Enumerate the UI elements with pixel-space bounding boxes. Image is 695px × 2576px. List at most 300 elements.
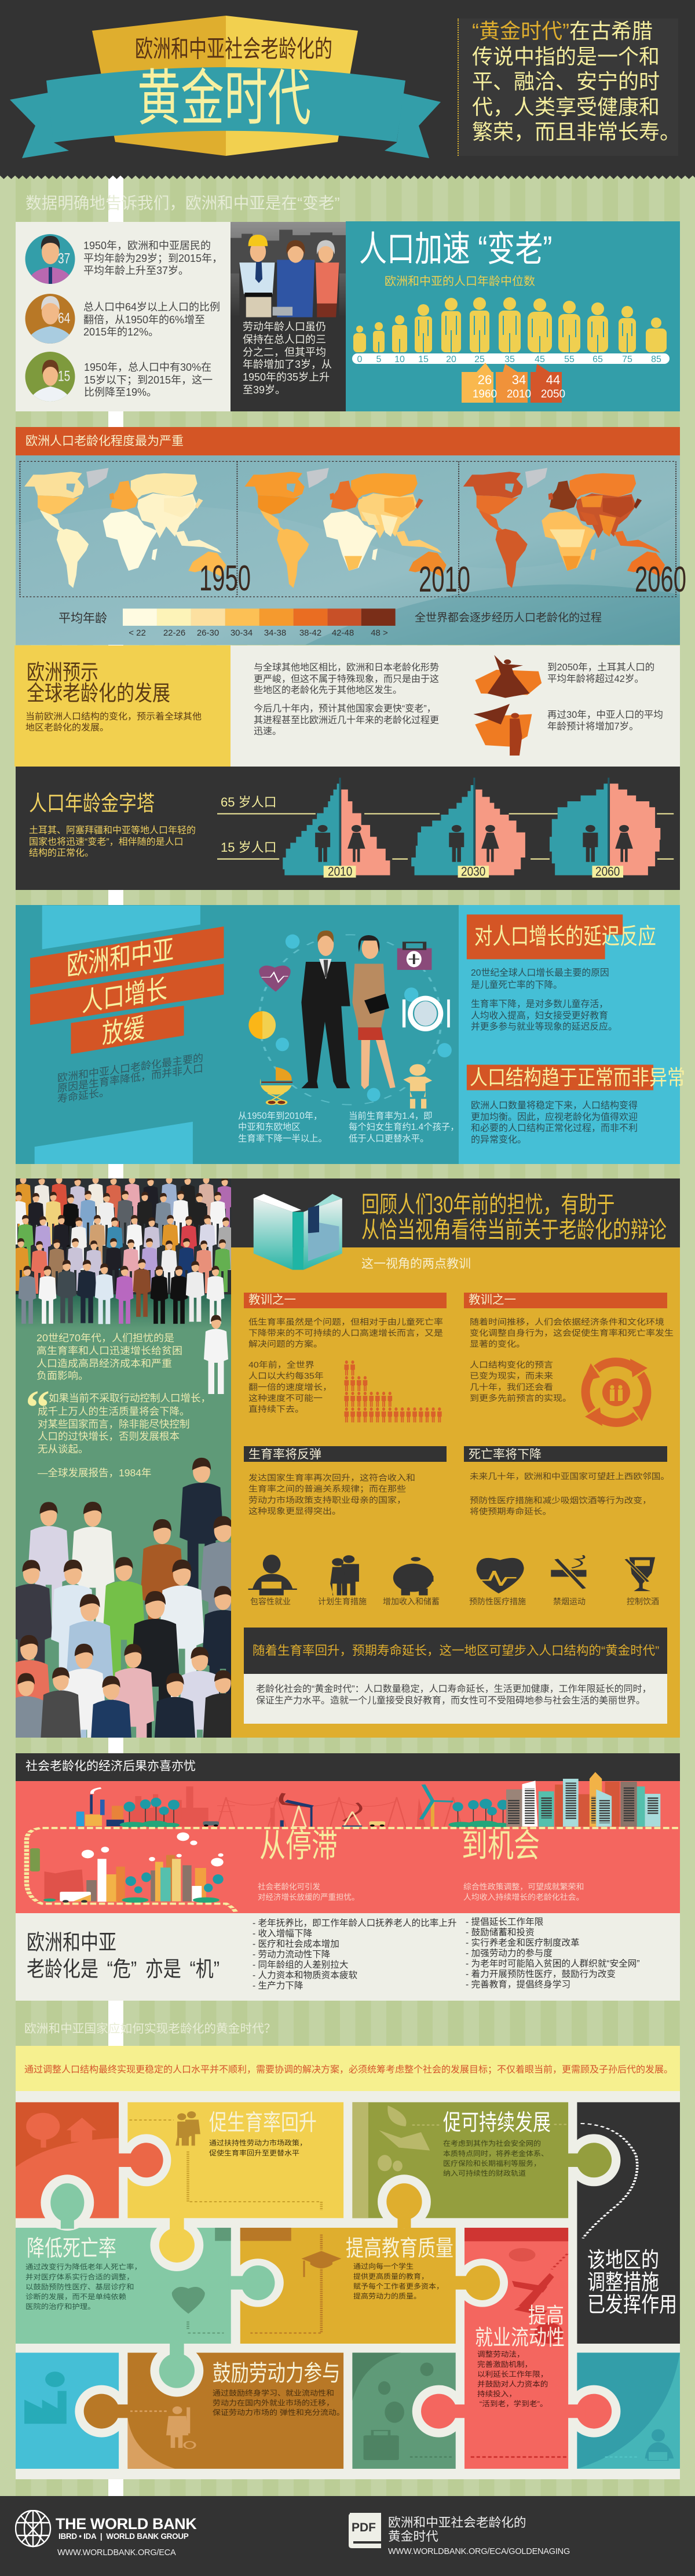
chart subtitle: 欧洲和中亚的人口年龄中位数 bbox=[385, 275, 535, 288]
list responses: - 提倡延长工作年限 bbox=[466, 1917, 543, 1927]
maps 1950 2010 2060: 30-34 bbox=[231, 628, 253, 638]
fertility text bbox=[248, 1473, 415, 1517]
banner: coordinated solutions bbox=[16, 2046, 680, 2091]
text opportunity: 人均收入持续增长的老龄化社会。 bbox=[463, 1892, 584, 1902]
title: golden age: 黄金时代 bbox=[137, 64, 311, 133]
callout 2010: 2010 bbox=[507, 388, 531, 400]
avatar label 15: 15 bbox=[58, 369, 70, 385]
intro text: “黄金时代”在古希腊 bbox=[472, 19, 653, 43]
heading: 欧洲预示 bbox=[27, 660, 98, 684]
heading text: 社会老龄化的经济后果亦喜亦忧 bbox=[25, 1760, 196, 1773]
piece text: sustainability: 纳入可持续性的财政轨道 bbox=[443, 2169, 526, 2177]
working-age text: 1950年的35岁上升 bbox=[243, 371, 330, 383]
report title: 欧洲和中亚社会老龄化的 bbox=[388, 2515, 526, 2530]
working-age text: 年龄增加了3岁，从 bbox=[243, 359, 332, 370]
heading normal structure: 人口结构趋于正常而非异常 bbox=[470, 1066, 685, 1089]
mortality text 2 bbox=[470, 1495, 652, 1518]
piece text: mortality: 诊断的发展，而不是单纯依赖 bbox=[25, 2293, 126, 2300]
heading: 人口加速 “变老” bbox=[359, 230, 552, 269]
quote mark: “ bbox=[25, 1381, 50, 1435]
lesson bar right bbox=[464, 1293, 667, 1308]
text 1970s bbox=[36, 1333, 182, 1381]
mortality text 2: 将使预期寿命延长。 bbox=[470, 1508, 551, 1516]
piece heading: mobility line 2: 就业流动性 bbox=[475, 2326, 565, 2350]
lesson text left: 低生育率虽然是个问题，但相对于由儿童死亡率 bbox=[248, 1318, 443, 1327]
dark piece heading: 调整措施 bbox=[587, 2270, 659, 2294]
intro text: 传说中指的是一个和 bbox=[472, 45, 660, 68]
text 1950 to 2010: 中亚和东欧地区 bbox=[238, 1122, 301, 1132]
callout 2050: 44 bbox=[546, 373, 560, 387]
text fertility 1.4 bbox=[349, 1111, 459, 1144]
callout 2050: 2050 bbox=[541, 388, 565, 400]
text delayed 1: 是儿童死亡率的下降。 bbox=[471, 980, 562, 990]
list responses: - 为老年时可能陷入贫困的人群织就“安全网” bbox=[466, 1959, 640, 1969]
report title: 黄金时代 bbox=[388, 2529, 438, 2544]
year 2010: 2010 bbox=[419, 560, 470, 600]
legend title: 平均年龄 bbox=[58, 612, 107, 625]
text prediction: 已变为现实，而未来 bbox=[470, 1372, 553, 1381]
text prediction: 人口结构变化的预言 bbox=[470, 1361, 553, 1370]
illustration: workers in front of city bbox=[231, 222, 346, 318]
lesson text right: 显著的变化。 bbox=[470, 1340, 525, 1349]
maps 1950 2010 2060 bbox=[16, 455, 680, 645]
section heading: how to achieve: 欧洲和中亚国家应如何实现老龄化的黄金时代？ bbox=[24, 2022, 276, 2035]
text 1: 与全球其他地区相比，欧洲和日本老龄化形势 bbox=[254, 663, 439, 673]
dark piece heading: 该地区的 bbox=[587, 2248, 659, 2272]
logo text: THE WORLD BANK bbox=[56, 2515, 196, 2533]
fact text 2: 2015年的12%。 bbox=[83, 326, 159, 338]
lesson bar left bbox=[244, 1293, 447, 1308]
skewed paragraph bbox=[57, 1052, 203, 1105]
list responses bbox=[466, 1917, 640, 1990]
label: 生育率将反弹 bbox=[248, 1448, 321, 1461]
text 2 bbox=[254, 703, 439, 736]
panel: danger and opportunity bbox=[16, 1913, 680, 2001]
callout 1960 bbox=[473, 373, 497, 400]
maps 1950 2010 2060: < 22 bbox=[129, 628, 146, 638]
panel: lessons from the past bbox=[231, 1178, 680, 1738]
panel: Europe foreshadows bbox=[14, 645, 231, 767]
text normal structure: 的异常变化。 bbox=[471, 1135, 526, 1145]
mortality text 2: 预防性医疗措施和减少吸烟饮酒等行为改变， bbox=[470, 1497, 652, 1505]
list challenges: - 收入增幅下降 bbox=[253, 1929, 312, 1939]
legend note: 全世界都会逐步经历人口老龄化的过程 bbox=[415, 612, 602, 624]
url world bank: WWW.WORLDBANK.ORG/ECA bbox=[57, 2548, 175, 2557]
callout: golden age dark box bbox=[244, 1628, 667, 1674]
piece text: sustainability: 医疗保险和长期福利等服务， bbox=[443, 2159, 541, 2167]
heading: 回顾人们30年前的担忧，有助于 bbox=[361, 1192, 614, 1218]
avatar label 64: 64 bbox=[58, 311, 70, 327]
intro text: 代，人类享受健康和 bbox=[472, 95, 660, 119]
piece text: mobility: 完善激励机制， bbox=[477, 2360, 532, 2368]
fact text 2: 总人口中64岁以上人口的比例 bbox=[83, 301, 220, 313]
maps 1950 2010 2060: 48 > bbox=[371, 628, 388, 638]
fact text 1 bbox=[83, 240, 222, 276]
heading: 全球老龄化的发展 bbox=[27, 681, 170, 705]
text 1970s: 人口造成高昂经济成本和严重 bbox=[36, 1358, 172, 1369]
piece text: education: 提高劳动力的质量。 bbox=[353, 2292, 421, 2300]
piece text: education: 赋予每个工作者更多资本， bbox=[353, 2282, 444, 2290]
text prediction: 几十年，我们还会看 bbox=[470, 1383, 553, 1392]
piece text: fertility: 促使生育率回升至更替水平 bbox=[209, 2149, 299, 2157]
text 1970s: 负面影响。 bbox=[36, 1370, 89, 1381]
panel: population pyramids bbox=[16, 767, 680, 890]
maps 1950 2010 2060: 42-48 bbox=[332, 628, 354, 638]
text doubling: 40年前，全世界 bbox=[248, 1361, 314, 1370]
skewed paragraph: 寿命延长。 bbox=[57, 1086, 109, 1105]
piece text: mobility: “活到老，学到老”。 bbox=[480, 2400, 548, 2407]
lesson text right: 变化调整自身行为，这会促使生育率和死亡率发生 bbox=[470, 1329, 674, 1338]
panel: population aging faster bbox=[346, 221, 680, 411]
text prediction bbox=[470, 1360, 572, 1403]
callout 2010: 34 bbox=[512, 373, 526, 387]
list responses: - 着力开展预防性医疗，鼓励行为改变 bbox=[466, 1969, 616, 1979]
label: 死亡率将下降 bbox=[469, 1448, 542, 1461]
piece text: education bbox=[353, 2262, 444, 2301]
maps 1950 2010 2060: 38-42 bbox=[299, 628, 321, 638]
working-age text: 保持在总人口的三 bbox=[243, 334, 326, 345]
text fertility 1.4: 当前生育率为1.4，即 bbox=[349, 1111, 433, 1121]
piece text: labor: 保证劳动力市场的 弹性和充分流动。 bbox=[213, 2408, 345, 2417]
icon: open book bbox=[254, 1194, 342, 1270]
label preventive care: 预防性医疗措施 bbox=[469, 1597, 526, 1606]
text: 土耳其、阿塞拜疆和中亚等地人口年轻的 bbox=[29, 826, 196, 835]
piece text: mortality: 并对医疗体系实行合适的调整， bbox=[25, 2273, 134, 2281]
text 1950 to 2010: 从1950年到2010年， bbox=[238, 1111, 322, 1121]
label 65: 65 岁人口 bbox=[221, 795, 277, 809]
piece text: mobility: 持续投入， bbox=[477, 2390, 517, 2398]
illustration: crowds of people bbox=[16, 1178, 231, 1738]
text opportunity bbox=[463, 1882, 584, 1902]
text opportunity: 综合性政策调整，可望成就繁荣和 bbox=[463, 1882, 584, 1891]
text normal structure bbox=[471, 1100, 638, 1145]
piece heading: education: 提高教育质量 bbox=[346, 2235, 453, 2261]
heading: 人口年龄金字塔 bbox=[29, 791, 155, 816]
list responses: - 完善教育，提倡终身学习 bbox=[466, 1980, 570, 1990]
working-age text: 分之二，但其平均 bbox=[243, 346, 326, 358]
subheading: 这一视角的两点教训 bbox=[361, 1257, 471, 1271]
text stagnation: 社会老龄化可引发 bbox=[258, 1882, 320, 1891]
heading bar: economic consequences bbox=[16, 1753, 680, 1781]
panel: population facts bbox=[16, 222, 231, 411]
piece text: mortality: 医院的治疗和护理。 bbox=[25, 2303, 96, 2310]
heading from stagnation: 从停滞 bbox=[259, 1827, 338, 1864]
quote text: 成千上万人的生活质量将会下降。 bbox=[38, 1406, 190, 1417]
text 2: 迅速。 bbox=[254, 727, 281, 736]
fact text 2: 翻倍，从1950年的6%增至 bbox=[83, 314, 205, 326]
lesson text left: 解决问题的方案。 bbox=[248, 1340, 323, 1349]
text delayed 2: 并更多参与就业等现象的延迟反应。 bbox=[471, 1022, 617, 1032]
piece heading: labor: 鼓励劳动力参与 bbox=[213, 2360, 341, 2386]
year 2010: 2010 bbox=[328, 865, 352, 879]
piece heading: sustainability: 促可持续发展 bbox=[443, 2110, 551, 2135]
panel: population growth slowing bbox=[16, 905, 680, 1164]
quote first line: 如果当前不采取行动控制人口增长， bbox=[49, 1392, 211, 1404]
panel: puzzle of policies bbox=[16, 2091, 680, 2479]
piece text: labor: 通过鼓励终身学习、就业流动性和 bbox=[213, 2389, 334, 2397]
footer bbox=[0, 2496, 695, 2576]
chart: median age people timeline: 25 bbox=[474, 355, 485, 364]
fertility text: 劳动力市场政策支持职业母亲的国家， bbox=[248, 1496, 406, 1505]
text: 地区老龄化的发展。 bbox=[25, 723, 109, 732]
logo: world bank globe bbox=[15, 2510, 73, 2568]
fertility text: 发达国家生育率再次回升，这符合收入和 bbox=[248, 1474, 415, 1483]
callout text: 随着生育率回升，预期寿命延长，这一地区可望步入人口结构的“黄金时代” bbox=[253, 1644, 659, 1658]
piece heading: mortality: 降低死亡率 bbox=[27, 2235, 116, 2261]
label alcohol control: 控制饮酒 bbox=[627, 1597, 659, 1606]
label inclusive employment: 包容性就业 bbox=[250, 1597, 291, 1606]
dark piece heading bbox=[587, 2249, 677, 2316]
chart: median age people timeline: 15 bbox=[418, 355, 429, 364]
heading bar: Europe aging bbox=[16, 427, 680, 455]
definition text: 保证生产力水平。造就一个儿童接受良好教育，而女性可不受阻碍地参与社会生活的美丽世界。 bbox=[256, 1696, 645, 1706]
text doubling: 人口以大约每35年 bbox=[248, 1372, 324, 1381]
working-age text: 至39岁。 bbox=[243, 384, 286, 396]
heading to opportunity: 到机会 bbox=[462, 1827, 540, 1864]
list challenges: - 人力资本和物质资本疲软 bbox=[253, 1971, 357, 1980]
heading text: 欧洲人口老龄化程度最为严重 bbox=[25, 435, 184, 448]
text 1950 to 2010 bbox=[238, 1111, 327, 1144]
heading line 2: 老龄化是 “危” 亦是 “机” bbox=[27, 1957, 220, 1982]
heading bbox=[361, 1192, 667, 1243]
fact text 3: 1950年，总人口中有30%在 bbox=[84, 362, 211, 373]
chart: median age people timeline bbox=[352, 297, 670, 403]
lesson text right bbox=[470, 1318, 674, 1349]
text normal structure: 和必要的人口结构正常化过程，而非不利 bbox=[471, 1123, 638, 1133]
chart: median age people timeline: 45 bbox=[535, 355, 545, 364]
url report: WWW.WORLDBANK.ORG/ECA/GOLDENAGING bbox=[388, 2547, 570, 2556]
text delayed 2 bbox=[471, 999, 617, 1032]
year 1950: 1950 bbox=[199, 559, 251, 599]
text Central Asia: 再过30年，中亚人口的平均 bbox=[547, 710, 663, 720]
list responses: - 加强劳动力的参与度 bbox=[466, 1949, 553, 1958]
text normal structure: 欧洲人口数量将稳定下来，人口结构变得 bbox=[471, 1101, 638, 1111]
text 1: 更严峻，但这不属于特殊现象，而只是由于这 bbox=[254, 674, 439, 684]
quote source: —全球发展报告，1984年 bbox=[38, 1467, 151, 1479]
maps 1950 2010 2060: 22-26 bbox=[163, 628, 185, 638]
list responses: - 实行养老金和医疗制度改革 bbox=[466, 1938, 580, 1948]
chart: median age people timeline: 55 bbox=[564, 355, 575, 364]
piece text: fertility bbox=[209, 2139, 307, 2158]
text: 结构的正常化。 bbox=[29, 848, 94, 858]
panel: working-age population bbox=[231, 222, 346, 411]
illustration: cities and road bbox=[16, 1781, 680, 1913]
chart: median age people timeline: 65 bbox=[592, 355, 603, 364]
working-age text bbox=[243, 321, 332, 396]
icons: three people avatars bbox=[25, 234, 75, 402]
quote text: 人口的过快增长，否则发展根本 bbox=[38, 1431, 180, 1442]
chart: median age people timeline: 85 bbox=[651, 355, 661, 364]
box: golden age definition bbox=[244, 1674, 667, 1724]
fact text 2 bbox=[83, 301, 220, 338]
report title bbox=[388, 2516, 526, 2544]
text fertility 1.4: 每个妇女生育约1.4个孩子， bbox=[349, 1122, 459, 1132]
list challenges: - 老年抚养比，即工作年龄人口抚养老人的比率上升 bbox=[253, 1918, 457, 1928]
lesson label: 教训之一 bbox=[248, 1293, 296, 1307]
icons: dancer and eagle hunter maps bbox=[474, 655, 542, 756]
text bbox=[29, 825, 196, 858]
label income and savings: 增加收入和储蓄 bbox=[383, 1597, 440, 1606]
illustration: ribbons, couple and life icons bbox=[30, 905, 653, 1164]
text 1970s: 高生育率和人口迅速增长给贫困 bbox=[36, 1345, 182, 1356]
piece heading: fertility: 促生育率回升 bbox=[209, 2110, 317, 2135]
text doubling: 翻一倍的速度增长， bbox=[248, 1383, 332, 1392]
panel: from stagnation to opportunity bbox=[16, 1781, 680, 1913]
piece text: sustainability: 本质特点同时，将养老金体系、 bbox=[443, 2150, 548, 2157]
banner text: 通过调整人口结构最终实现更稳定的人口水平并不顺利，需要协调的解决方案，必须统筹考虑整个社会的发展目标；不仅着眼当前，更需顾及子孙后代的发展。 bbox=[24, 2065, 673, 2075]
fertility text: 生育率之间的普遍关系规律；而在那些 bbox=[248, 1485, 406, 1494]
maps 1950 2010 2060: 26-30 bbox=[197, 628, 219, 638]
fact text 1: 平均年龄上升至37岁。 bbox=[83, 265, 189, 276]
mortality text 1: 未来几十年，欧洲和中亚国家可望赶上西欧邻国。 bbox=[470, 1472, 670, 1481]
text normal structure: 更加均衡。因此，应视老龄化为值得欢迎 bbox=[471, 1112, 638, 1122]
skewed paragraph: 欧洲和中亚人口老龄化最主要的 bbox=[57, 1052, 203, 1084]
fact text 1: 平均年龄为29岁；到2015年， bbox=[83, 253, 222, 264]
quote text: 对某些国家而言，除非能尽快控制 bbox=[38, 1418, 190, 1430]
title: subtitle: 欧洲和中亚社会老龄化的 bbox=[135, 35, 332, 63]
ribbon text line 1: 欧洲和中亚 bbox=[67, 935, 174, 981]
text 1950 to 2010: 生育率下降一半以上。 bbox=[238, 1134, 327, 1144]
logo subtext: IBRD • IDA | WORLD BANK GROUP bbox=[58, 2532, 188, 2541]
quote text: 无从谈起。 bbox=[38, 1443, 88, 1455]
callout 2010 bbox=[507, 373, 531, 400]
callout 1960: 1960 bbox=[473, 388, 497, 400]
list challenges: - 生产力下降 bbox=[253, 1981, 303, 1991]
puzzle pieces and icons bbox=[16, 2091, 680, 2479]
list challenges: - 劳动力流动性下降 bbox=[253, 1950, 330, 1960]
text delayed 2: 生育率下降，是对多数儿童存活， bbox=[471, 999, 608, 1009]
heading delayed response: 对人口增长的延迟反应 bbox=[474, 924, 656, 949]
dark piece heading: 已发挥作用 bbox=[587, 2292, 677, 2316]
icon: cycle arrows with family bbox=[581, 1358, 651, 1427]
chart: pyramids bbox=[217, 778, 674, 878]
text stagnation bbox=[258, 1882, 359, 1902]
label anti-smoking: 禁烟运动 bbox=[553, 1597, 586, 1606]
chart: median age people timeline: 35 bbox=[504, 355, 515, 364]
text Turkey: 到2050年，土耳其人口的 bbox=[547, 662, 654, 673]
text 2: 其进程甚至比欧洲近几十年来的老龄化过程更 bbox=[254, 715, 439, 725]
panel: world maps bbox=[16, 455, 680, 645]
piece text: mobility bbox=[477, 2350, 548, 2409]
piece text: mortality: 以鼓励预防性医疗、基层诊疗和 bbox=[25, 2283, 134, 2290]
panel: crowd and report quote bbox=[16, 1178, 231, 1738]
icon: PDF report bbox=[348, 2512, 388, 2553]
text Turkey bbox=[547, 662, 654, 684]
fertility text: 这种现象更显得突出。 bbox=[248, 1508, 341, 1516]
intro text bbox=[472, 19, 681, 144]
text doubling bbox=[248, 1360, 332, 1414]
piece text: mobility: 以利延长工作年限， bbox=[477, 2370, 548, 2378]
piece heading: mobility line 1: 提高 bbox=[528, 2304, 564, 2328]
text 1 bbox=[254, 662, 439, 695]
text Central Asia bbox=[547, 709, 663, 731]
label family planning: 计划生育措施 bbox=[318, 1597, 367, 1606]
bar: mortality decline bbox=[464, 1446, 667, 1462]
lesson label: 教训之一 bbox=[469, 1293, 516, 1307]
list responses: - 鼓励储蓄和投资 bbox=[466, 1928, 535, 1938]
piece text: mobility: 调整劳动法， bbox=[477, 2351, 525, 2358]
piece text: labor bbox=[213, 2388, 345, 2417]
heading bbox=[27, 660, 170, 705]
label 15: 15 岁人口 bbox=[221, 840, 277, 855]
piece text: fertility: 通过扶持性劳动力市场政策， bbox=[209, 2139, 307, 2147]
text Central Asia: 年龄预计将增加7岁。 bbox=[547, 721, 639, 731]
intro text block bbox=[458, 19, 678, 156]
piece text: labor: 劳动力在国内外就业市场的迁移， bbox=[213, 2399, 334, 2407]
avatar label 37: 37 bbox=[58, 251, 70, 267]
fact text 3: 比例降至19%。 bbox=[84, 386, 157, 398]
definition text: 老龄化社会的“黄金时代”：人口数量稳定，人口寿命延长，生活更加健康，工作年限延长的同时， bbox=[256, 1684, 652, 1694]
piece text: education: 提供更高质量的教育， bbox=[353, 2272, 429, 2280]
chart: median age people timeline: 0 bbox=[357, 355, 363, 364]
piece text: education: 通过向每一个学生 bbox=[353, 2263, 414, 2270]
ribbon text line 3: 放缓 bbox=[102, 1013, 145, 1049]
text 1970s: 20世纪70年代，人们担忧的是 bbox=[36, 1333, 174, 1344]
maps 1950 2010 2060: 34-38 bbox=[264, 628, 286, 638]
quote text bbox=[38, 1406, 190, 1455]
chart: doubling people bbox=[344, 1360, 442, 1422]
chart: median age people timeline: 10 bbox=[394, 355, 405, 364]
text delayed 1: 20世纪全球人口增长最主要的原因 bbox=[471, 968, 609, 978]
text doubling: 这种速度不可能一 bbox=[248, 1394, 323, 1403]
working-age text: 劳动年龄人口虽仍 bbox=[243, 321, 326, 333]
intro text: 平、融洽、安宁的时 bbox=[472, 70, 660, 93]
callout 1960: 26 bbox=[478, 373, 492, 387]
panel: header bbox=[0, 0, 695, 179]
fact text 3 bbox=[84, 362, 213, 398]
ribbon text line 2: 人口增长 bbox=[82, 974, 167, 1017]
year 2030: 2030 bbox=[461, 865, 485, 879]
chart: median age people timeline: 75 bbox=[622, 355, 632, 364]
piece text: mortality bbox=[25, 2263, 142, 2312]
text Turkey: 平均年龄将超过42岁。 bbox=[547, 673, 644, 684]
piece text: sustainability: 在考虑到其作为社会安全网的 bbox=[443, 2140, 541, 2147]
text: 当前欧洲人口结构的变化，预示着全球其他 bbox=[25, 712, 202, 721]
text stagnation: 对经济增长放缓的严重担忧。 bbox=[258, 1892, 359, 1902]
year 2060: 2060 bbox=[595, 865, 620, 879]
text delayed 1 bbox=[471, 968, 609, 990]
chart: median age people timeline: 20 bbox=[446, 355, 456, 364]
title banner ribbon bbox=[10, 16, 441, 158]
piece text: mortality: 通过改变行为降低老年人死亡率， bbox=[25, 2263, 142, 2271]
lesson text right: 随着时间推移，人们会依据经济条件和文化环境 bbox=[470, 1318, 664, 1327]
fact text 1: 1950年，欧洲和中亚居民的 bbox=[83, 240, 211, 251]
fact text 3: 15岁以下；到2015年，这一 bbox=[84, 374, 213, 386]
heading line 1: 欧洲和中亚 bbox=[27, 1931, 116, 1955]
text delayed 2: 人均收入提高，妇女接受更好教育 bbox=[471, 1010, 608, 1021]
callout 2050 bbox=[541, 373, 565, 400]
text bbox=[25, 711, 202, 732]
list challenges: - 医疗和社会成本增加 bbox=[253, 1939, 339, 1949]
piece text: sustainability bbox=[443, 2139, 548, 2179]
text fertility 1.4: 低于人口更替水平。 bbox=[349, 1134, 429, 1144]
text prediction: 到更多先前预言的实现。 bbox=[470, 1394, 572, 1403]
text 2: 今后几十年内，预计其他国家会更快“变老”， bbox=[254, 704, 436, 714]
piece text: mobility: 并鼓励对人力资本的 bbox=[477, 2380, 548, 2388]
heading: 从恰当视角看待当前关于老龄化的辩论 bbox=[361, 1217, 667, 1243]
icon: PDF report: PDF bbox=[352, 2521, 376, 2534]
year 2060: 2060 bbox=[635, 560, 686, 600]
intro text: 繁荣，而且非常长寿。 bbox=[472, 120, 681, 144]
skewed paragraph: 原因是生育率降低，而并非人口 bbox=[57, 1063, 203, 1094]
text 1: 些地区的老龄化先于其他地区发生。 bbox=[254, 685, 402, 695]
lesson text left: 下降带来的不可持续的人口高速增长而言，又是 bbox=[248, 1329, 443, 1338]
bar: fertility rebound bbox=[244, 1446, 447, 1462]
section heading: data: 数据明确地告诉我们，欧洲和中亚是在“变老” bbox=[25, 194, 340, 212]
text doubling: 直持续下去。 bbox=[248, 1405, 304, 1414]
panel: global comparison bbox=[231, 645, 680, 767]
list challenges bbox=[253, 1918, 457, 1991]
